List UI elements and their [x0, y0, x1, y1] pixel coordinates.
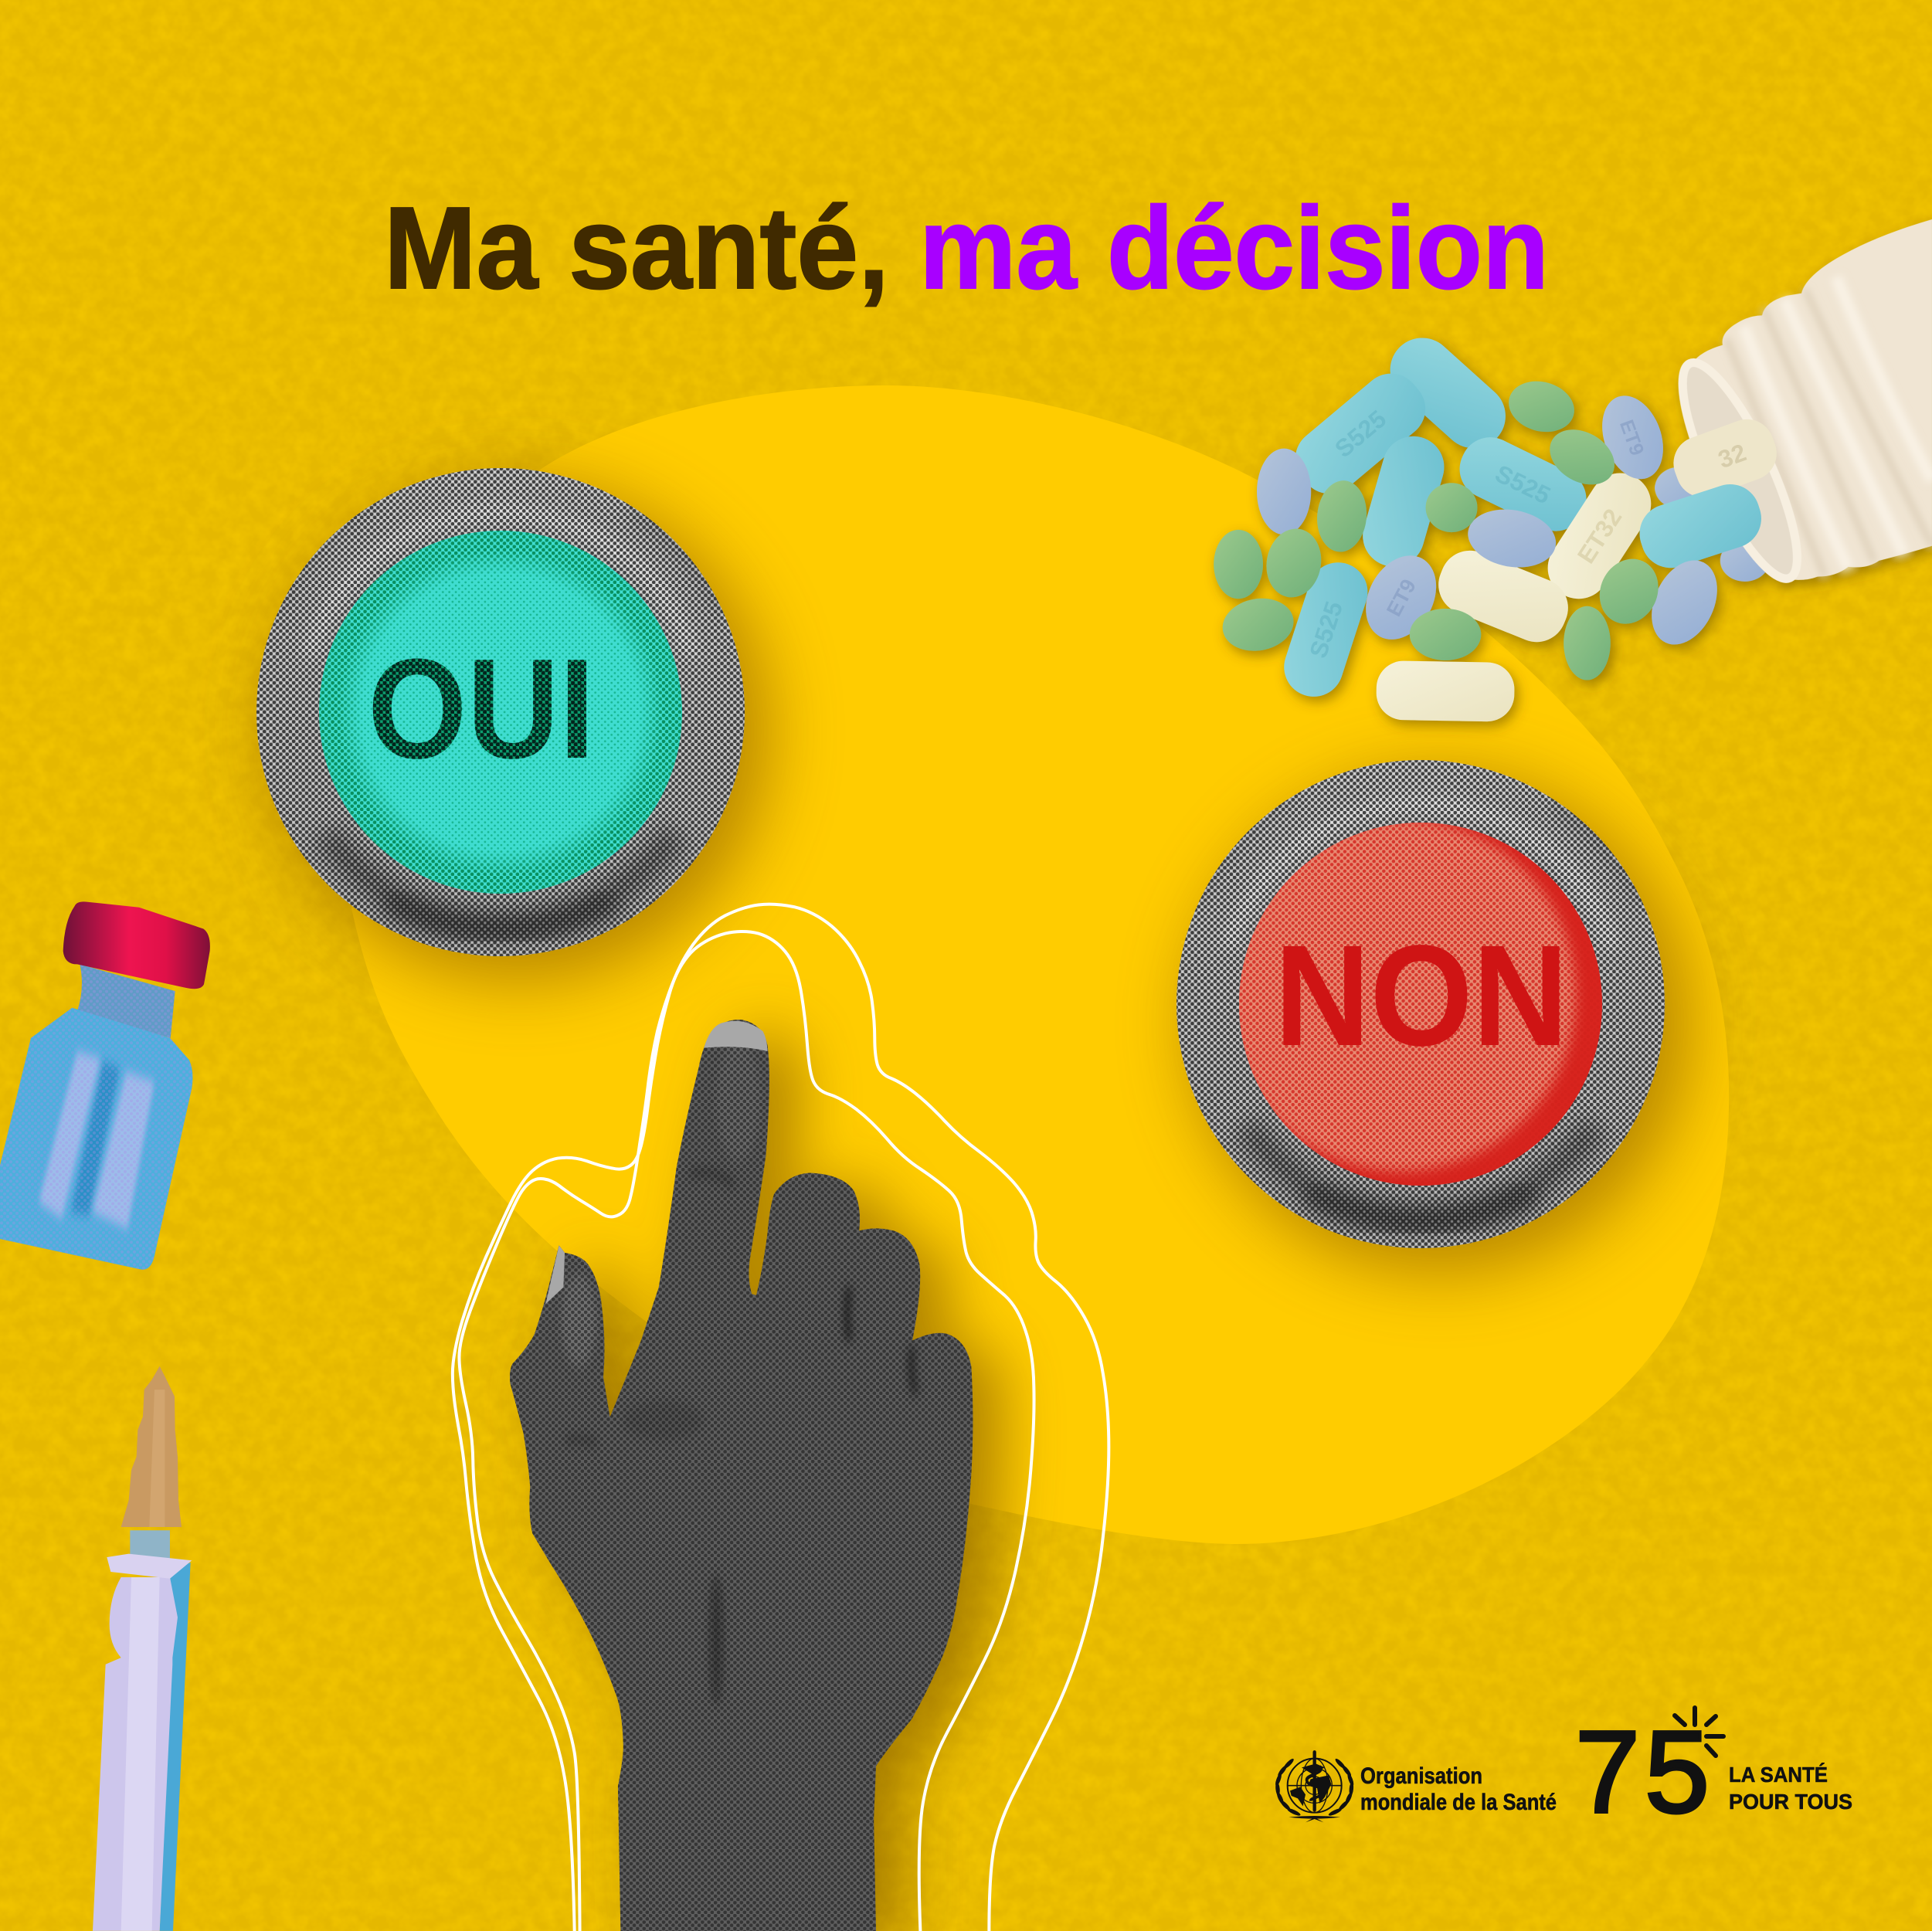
icon: sun rays — [1675, 1708, 1723, 1756]
icon: WHO emblem — [1275, 1752, 1355, 1822]
yellow blob — [350, 385, 1729, 1544]
title: ma décision — [919, 182, 1549, 313]
periwinkle tablets: ET9 — [1381, 575, 1421, 620]
pills and bottle — [1214, 219, 1932, 722]
white contour lines around hand — [453, 904, 1109, 1931]
periwinkle tablets: ET9 — [1615, 417, 1648, 459]
organisation name — [1360, 1763, 1557, 1815]
vial with red cap — [0, 901, 210, 1270]
button: OUI — [247, 456, 769, 980]
pills behind bottle — [1655, 467, 1770, 582]
75 years logo — [1575, 1706, 1852, 1837]
capsule pills — [1276, 324, 1784, 722]
syringe — [93, 1366, 192, 1931]
capsule pills: S525 — [1491, 460, 1555, 510]
label: OUI: OUI — [368, 629, 595, 788]
WHO logo — [1275, 1752, 1557, 1822]
green tablets — [1214, 374, 1669, 680]
number 75: 7 — [1575, 1706, 1640, 1837]
title — [384, 182, 1549, 313]
slogan: POUR TOUS — [1729, 1790, 1852, 1814]
pill bottle — [1662, 219, 1932, 591]
organisation name: mondiale de la Santé — [1360, 1790, 1557, 1815]
capsule pills: S525 — [1329, 405, 1391, 463]
slogan — [1729, 1763, 1852, 1814]
capsule pills: ET32 — [1572, 504, 1627, 568]
number 75 — [1575, 1706, 1710, 1837]
hand pointing, with drop shadow — [494, 1004, 1002, 1931]
title: Ma santé, — [384, 182, 889, 313]
button: NON — [1166, 749, 1689, 1272]
number 75: 5 — [1645, 1706, 1710, 1837]
organisation name: Organisation — [1360, 1763, 1482, 1789]
capsule pills: 32 — [1714, 438, 1750, 473]
periwinkle tablets — [1257, 387, 1730, 655]
fingernails — [545, 1021, 767, 1304]
capsule pills: S525 — [1304, 598, 1348, 661]
slogan: LA SANTÉ — [1729, 1763, 1828, 1787]
label: OUI: OUI — [368, 629, 595, 788]
label: NON: NON — [1275, 916, 1568, 1076]
